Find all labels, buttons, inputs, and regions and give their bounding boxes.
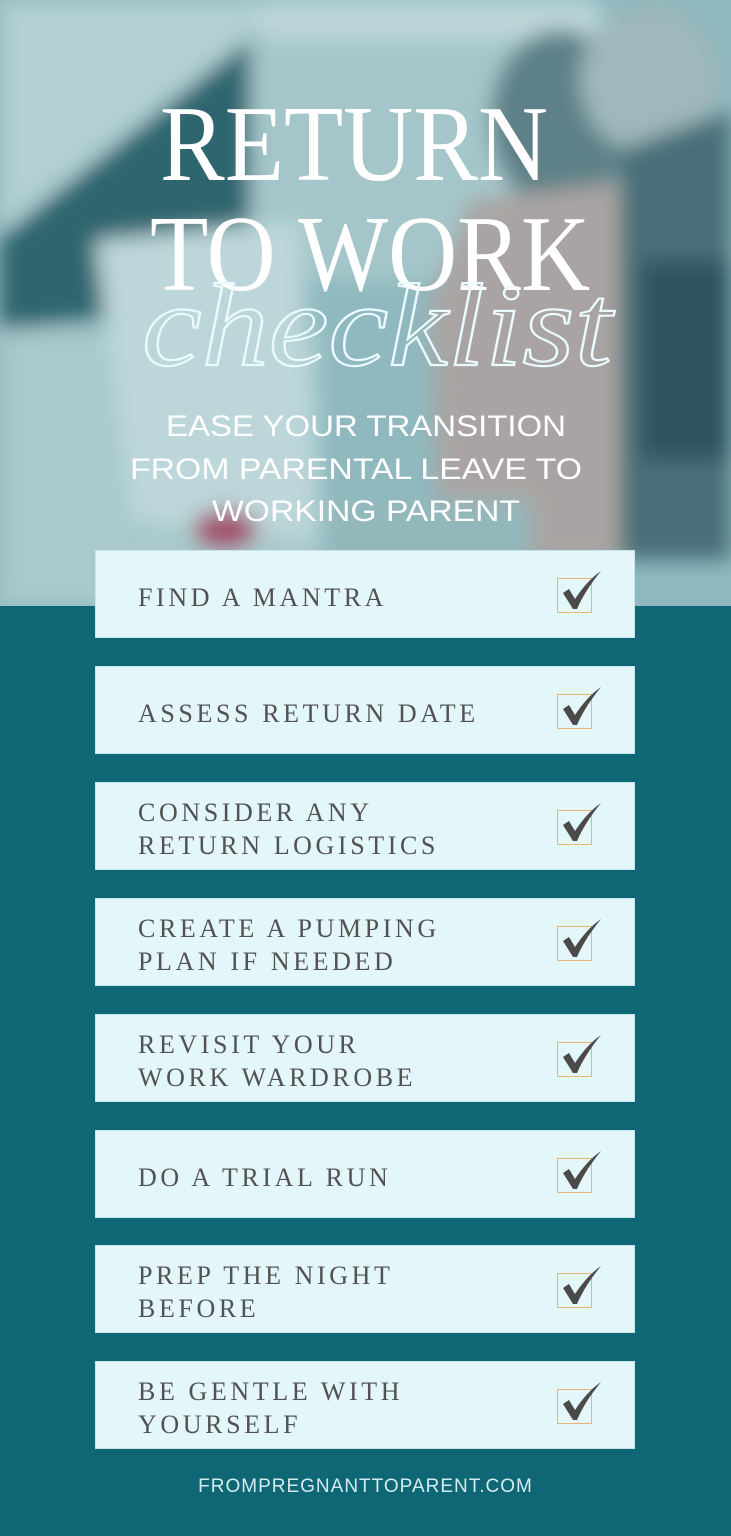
checklist item 7: BEFORE xyxy=(138,1294,259,1323)
subtitle: WORKING PARENT xyxy=(212,495,520,528)
title: RETURN: RETURN xyxy=(160,85,548,204)
checklist item 8 xyxy=(95,1361,635,1449)
title block xyxy=(130,85,616,528)
checklist item 8: YOURSELF xyxy=(138,1410,301,1439)
checklist item 3 xyxy=(95,782,635,870)
checklist item 3: RETURN LOGISTICS xyxy=(138,831,439,860)
checklist item 3: CONSIDER ANY xyxy=(138,798,373,827)
checklist item 4: PLAN IF NEEDED xyxy=(138,947,396,976)
checklist item 6: DO A TRIAL RUN xyxy=(138,1163,391,1192)
checklist item 7: PREP THE NIGHT xyxy=(138,1261,394,1290)
subtitle: EASE YOUR TRANSITION xyxy=(166,410,566,443)
checklist item 1 xyxy=(95,550,635,638)
checklist item 2 xyxy=(95,666,635,754)
hero photo background xyxy=(0,0,731,606)
subtitle: FROM PARENTAL LEAVE TO xyxy=(130,453,582,486)
checklist item 2: ASSESS RETURN DATE xyxy=(138,699,479,728)
checklist item 4: CREATE A PUMPING xyxy=(138,914,440,943)
checklist item 5: WORK WARDROBE xyxy=(138,1063,416,1092)
checklist item 5: REVISIT YOUR xyxy=(138,1030,360,1059)
checklist item 8: BE GENTLE WITH xyxy=(138,1377,403,1406)
checklist item 1: FIND A MANTRA xyxy=(138,583,387,612)
checklist item 5 xyxy=(95,1014,635,1102)
subtitle xyxy=(130,410,582,528)
title: TO WORK: TO WORK xyxy=(150,195,590,314)
checklist item 4 xyxy=(95,898,635,986)
checklist item 7 xyxy=(95,1245,635,1333)
checklist item 6 xyxy=(95,1130,635,1218)
footer url: FROMPREGNANTTOPARENT.COM xyxy=(198,1476,533,1497)
title: checklist script: checklist xyxy=(142,260,616,391)
